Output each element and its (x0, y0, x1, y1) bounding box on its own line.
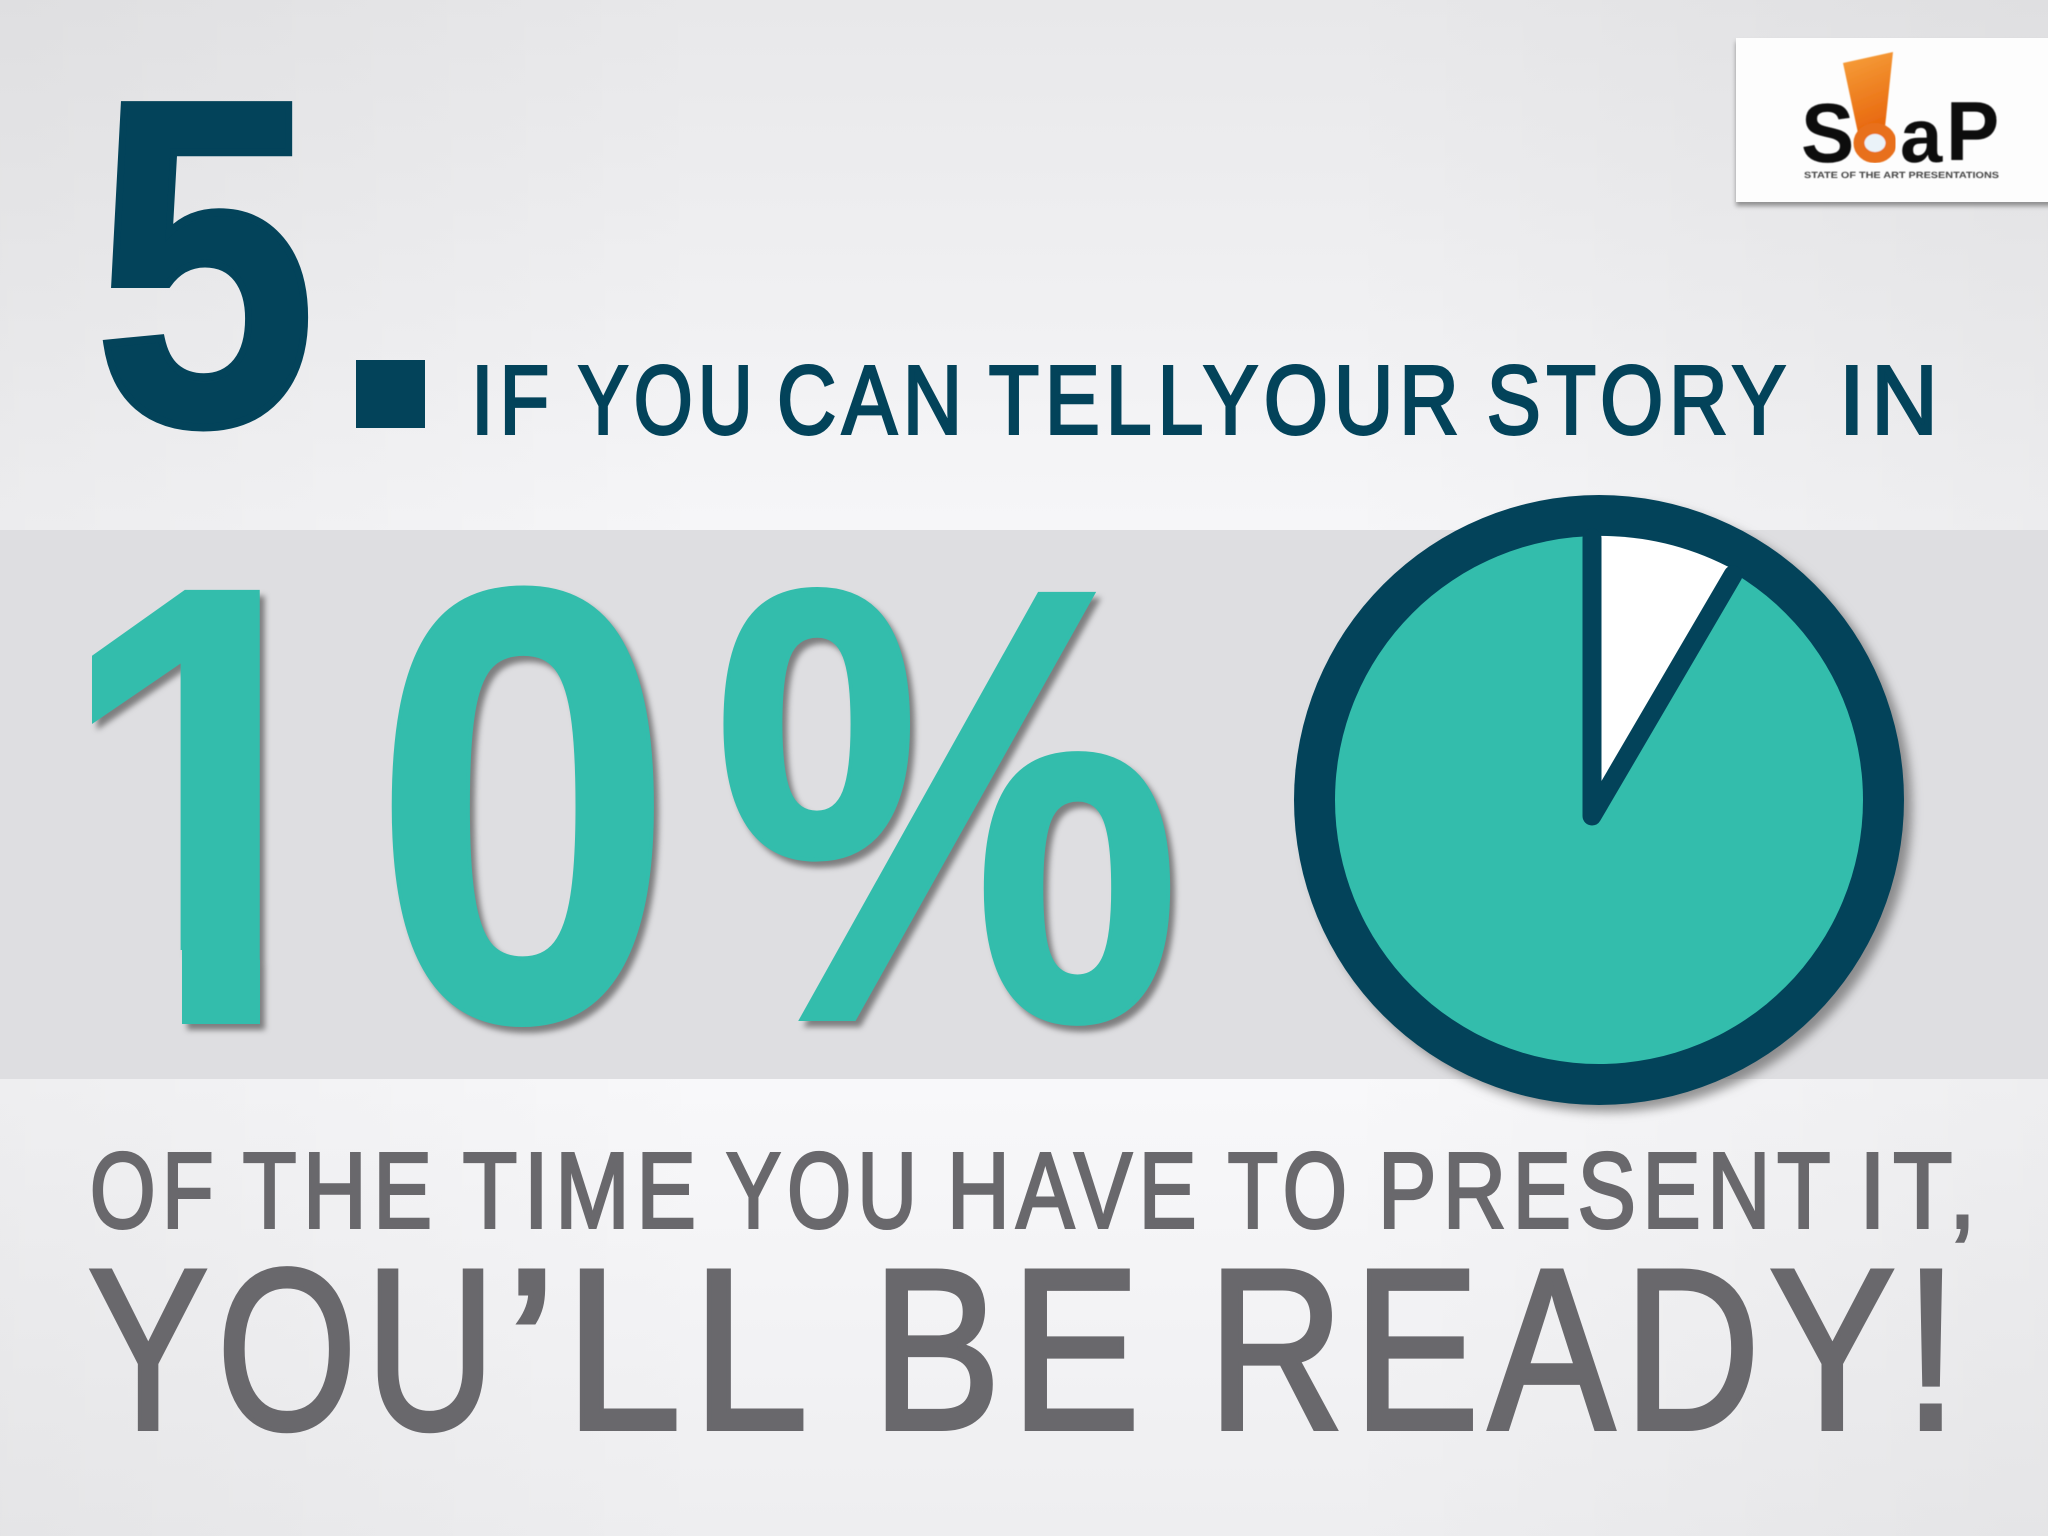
pie chart (1294, 495, 1904, 1105)
heading line: IN (1839, 346, 1944, 454)
heading line: IF (471, 346, 555, 454)
big statistic 10%: % (712, 460, 1182, 1150)
body line: HAVE (947, 1130, 1203, 1250)
big statistic 10%: 1 (46, 453, 367, 1158)
conclusion line: YOU (88, 1222, 504, 1478)
grey band (0, 530, 2048, 1079)
body line: THE (243, 1130, 439, 1250)
logo: tagline: STATE OF THE ART PRESENTATIONS (1804, 170, 1999, 180)
heading line: TELLYOUR (989, 346, 1465, 454)
heading period (356, 360, 425, 428)
heading line: YOU (578, 346, 758, 454)
body line: YOU (726, 1130, 923, 1250)
logo: wordmark (1801, 84, 1999, 180)
logo: wordmark: P (1946, 84, 1999, 178)
conclusion line: ’ (506, 1222, 569, 1478)
pie slice: 10 percent (1592, 536, 1738, 820)
conclusion line (88, 1222, 1967, 1478)
heading line: STORY (1487, 346, 1792, 454)
heading line (471, 346, 1944, 454)
body line (90, 1130, 1983, 1250)
slice outline (1592, 538, 1733, 816)
big statistic 10% (92, 586, 1179, 1037)
big statistic 10%: 0 (372, 460, 674, 1150)
logo: exclamation mark (1843, 52, 1893, 158)
conclusion line: LL (565, 1222, 819, 1478)
conclusion line: BE (872, 1222, 1150, 1478)
logo: wordmark: S (1801, 86, 1854, 180)
logo: wordmark: a (1900, 94, 1943, 179)
logo card (1736, 38, 2048, 202)
body line: PRESENT (1378, 1130, 1837, 1250)
body line: TIME (463, 1130, 703, 1250)
body line: OF (90, 1130, 220, 1250)
heading line: CAN (777, 346, 968, 454)
body line: IT, (1859, 1130, 1983, 1250)
heading number 5: 5 (94, 5, 316, 521)
body line: TO (1228, 1130, 1353, 1250)
